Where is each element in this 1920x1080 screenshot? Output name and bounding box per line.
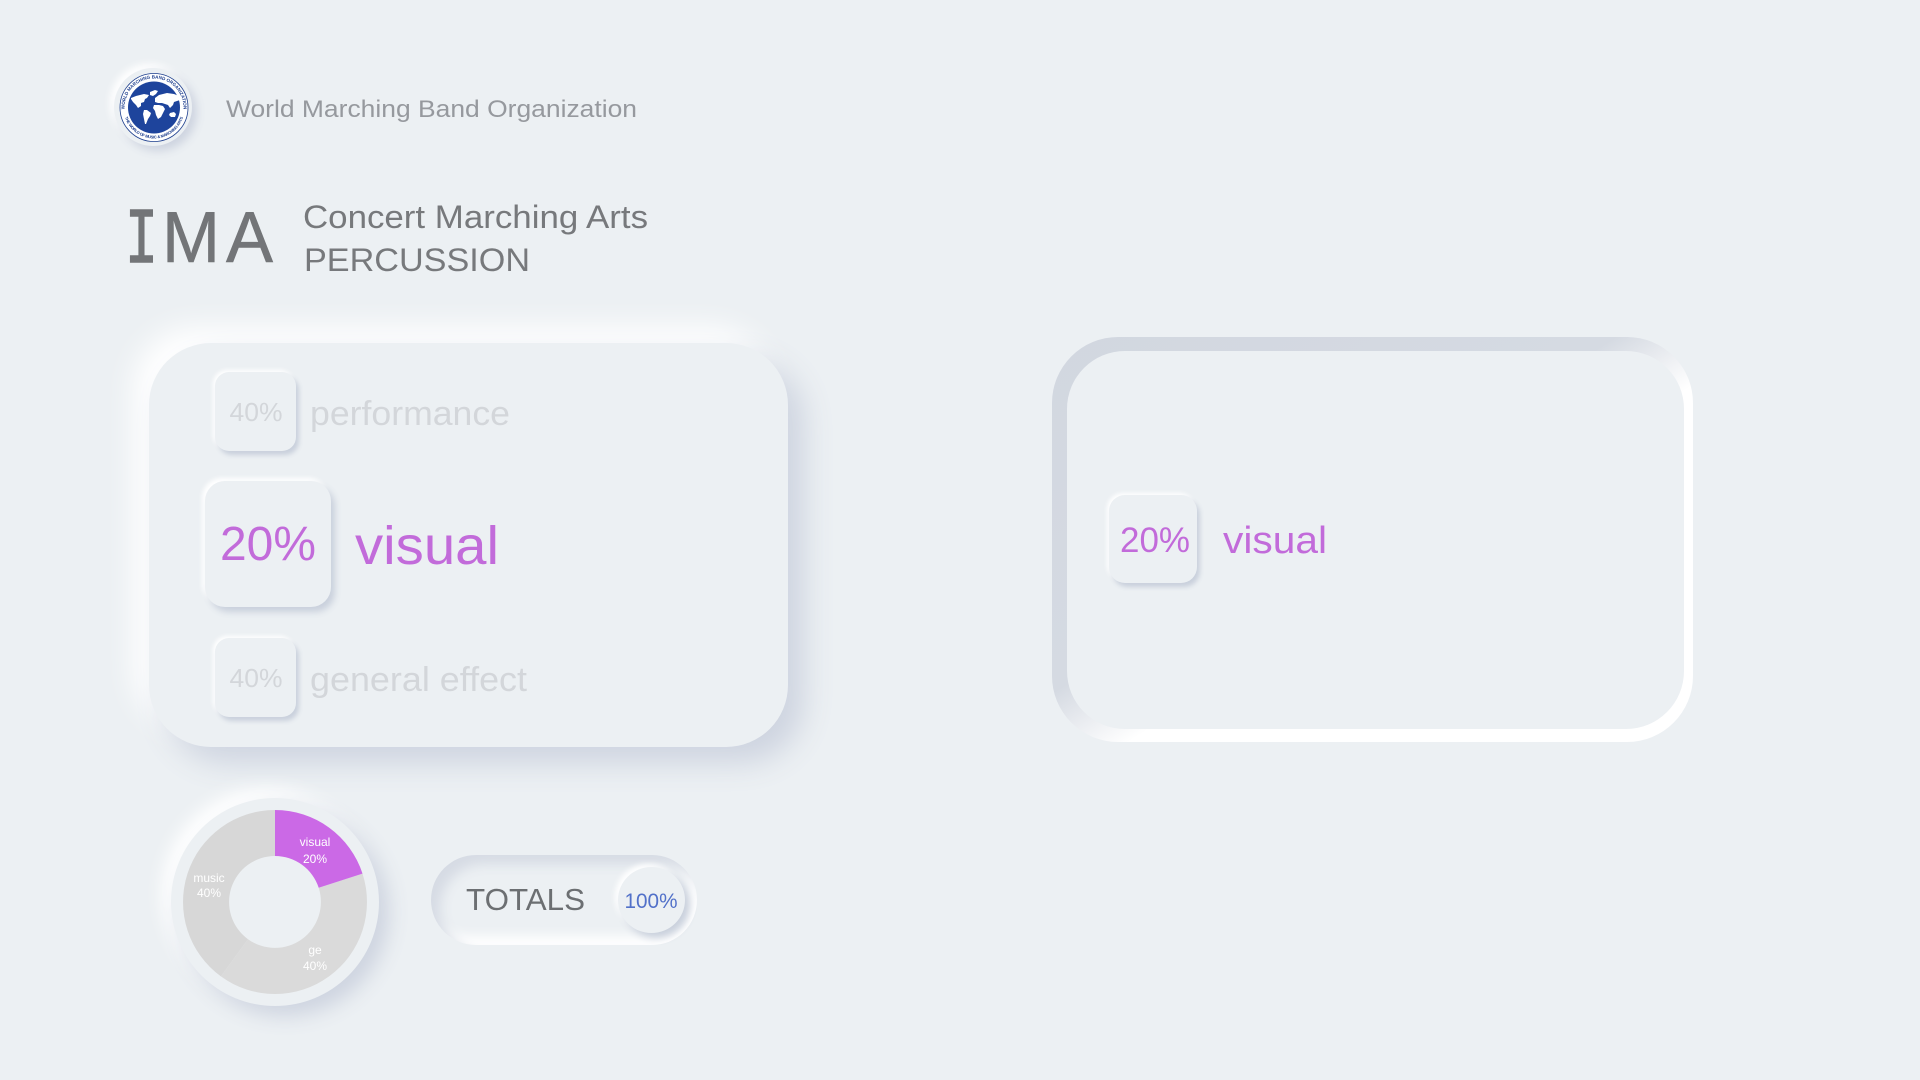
donut label: visual 20% — [300, 835, 330, 866]
subtitle: Concert Marching Arts: Concert Marching Arts — [303, 199, 648, 235]
donut slice: ge — [221, 874, 367, 994]
panel: inset detail — [1052, 337, 1693, 742]
chip: detail visual 20% — [1109, 495, 1197, 583]
chip: visual 20%: 20% — [220, 518, 316, 571]
panel: score categories — [149, 343, 788, 747]
logo badge: WORLD MARCHING BAND ORGANIZATION — [121, 75, 187, 110]
label: performance: performance — [310, 395, 510, 433]
donut label: ge 40%: 40% — [303, 959, 327, 973]
chip: general effect 40%: 40% — [230, 663, 282, 693]
label: TOTALS: TOTALS — [466, 882, 585, 917]
donut slice: visual — [275, 810, 362, 888]
donut label: ge 40% — [303, 943, 327, 973]
subtitle: PERCUSSION: PERCUSSION — [304, 242, 530, 278]
title: IMA — [125, 196, 274, 286]
logo badge — [114, 68, 192, 146]
donut label: music 40% — [193, 871, 225, 900]
donut label: music 40%: 40% — [197, 886, 221, 900]
chip: performance 40% — [215, 372, 296, 451]
donut label: visual 20%: 20% — [303, 852, 327, 866]
chip: general effect 40% — [215, 638, 296, 717]
donut label: ge 40%: ge — [308, 943, 322, 957]
chip: performance 40%: 40% — [230, 397, 282, 427]
organization name: World Marching Band Organization — [226, 96, 637, 123]
donut chart disc — [171, 798, 379, 1006]
knob: 100%: 100% — [624, 890, 678, 913]
donut slice: music — [183, 810, 275, 976]
title: IMA: I — [125, 196, 158, 286]
label: general effect: general effect — [310, 661, 528, 699]
totals pill — [431, 855, 697, 945]
knob: 100% — [618, 867, 685, 933]
title: IMA: A — [226, 198, 273, 278]
logo badge: THE WORLD OF MUSIC & MARCHING ARTS — [125, 116, 183, 138]
chip: visual 20% — [205, 481, 331, 607]
panel inner surface — [1067, 351, 1684, 729]
title: IMA: M — [162, 198, 220, 278]
label: visual: visual — [355, 516, 499, 576]
chip: detail visual 20%: 20% — [1120, 521, 1190, 560]
label: detail visual: visual — [1223, 520, 1327, 562]
donut label: visual 20%: visual — [300, 835, 330, 849]
donut label: music 40%: music — [193, 871, 225, 885]
